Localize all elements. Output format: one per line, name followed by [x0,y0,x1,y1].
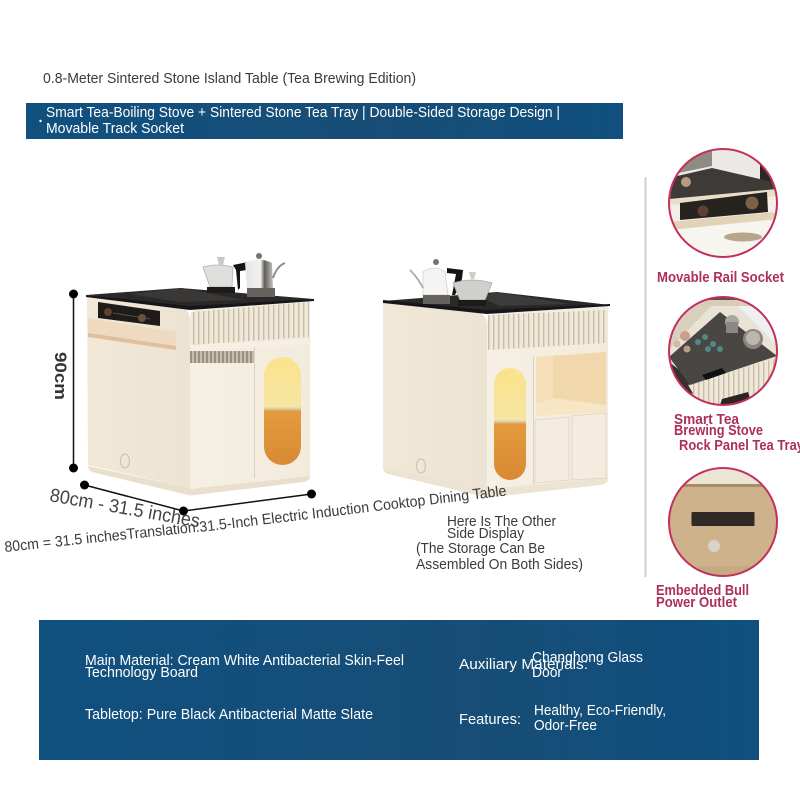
note: other side display: (The Storage Can Be [416,540,545,557]
feature: movable rail socket [657,149,784,286]
icon: rail socket photo [669,149,777,257]
open shelf [536,352,606,416]
spec: main material: Main Material: Cream White Antibacterial Skin-Feel [85,652,404,669]
feature: smart tea brewing stove: Brewing Stove [674,422,763,439]
power button [416,459,426,473]
fluted panel [488,310,606,350]
divider [644,177,646,577]
icon: outlet photo [669,468,777,576]
product: front-view cabinet [86,253,314,495]
label: cooktop table: 31.5-Inch Electric Induction Cooktop Dining Table [198,483,507,536]
spec: features: Features: [459,711,521,728]
note: other side display: Side Display [447,525,524,542]
spec: auxiliary materials: Auxiliary Materials: [459,656,588,673]
spec: auxiliary materials: Door [532,664,562,681]
note: other side display: Assembled On Both Sides) [416,556,583,573]
title: 0.8-Meter Sintered Stone Island Table (Tea Brewing Edition) [43,70,416,87]
spec: features [459,702,666,734]
spec: features: Healthy, Eco-Friendly, [534,702,666,719]
lower doors [535,413,606,483]
dimension: height 90cm: 90cm [51,352,70,400]
spec: auxiliary materials [459,649,643,681]
note: other side display [416,513,583,573]
specifications panel [39,620,759,760]
header banner: Movable Track Socket [46,120,185,137]
glass pot [203,257,235,293]
power button [120,454,130,468]
feature: smart tea brewing stove [669,297,800,454]
cabinet left side [383,303,487,488]
feature: embedded bull power outlet [656,468,777,611]
note: other side display: Here Is The Other [447,513,556,530]
feature: embedded bull power outlet: Power Outlet [656,594,737,611]
kettle [410,259,463,304]
header banner: Smart Tea-Boiling Stove + Sintered Stone Tea Tray | Double-Sided Storage Design | [46,104,560,121]
product: back-view cabinet [383,259,610,497]
cabinet front [487,306,608,489]
reflective strip [190,351,255,363]
spec: auxiliary materials: Changhong Glass [532,649,643,666]
spec: features: Odor-Free [534,717,597,734]
spec: tabletop: Tabletop: Pure Black Antibacterial Matte Slate [85,706,373,723]
label: 80cm conversion: 80cm = 31.5 inchesTranslation: [4,519,200,556]
feature: smart tea brewing stove: Smart Tea [674,411,740,428]
dimension: height 90cm [51,290,78,472]
cabinet left side [87,297,190,488]
rail socket [98,302,160,326]
glass door window [264,357,301,465]
fluted panel [191,302,309,345]
black stone top [86,288,314,308]
cabinet base [383,468,608,497]
cabinet front [190,301,310,489]
feature: embedded bull power outlet: Embedded Bull [656,582,749,599]
black stone top [383,292,610,312]
header banner [26,103,623,139]
open niche [88,318,176,350]
cabinet base [88,466,310,495]
glass door window [494,368,526,480]
feature: movable rail socket: Movable Rail Socket [657,269,784,286]
spec: main material: Technology Board [85,664,198,681]
glass pot [453,272,492,306]
spec: main material [85,652,404,681]
kettle [233,253,285,297]
icon: stove photo [669,297,777,405]
label: 80cm depth: 80cm - 31.5 inches [48,485,201,532]
dimension: width lines [80,480,316,516]
